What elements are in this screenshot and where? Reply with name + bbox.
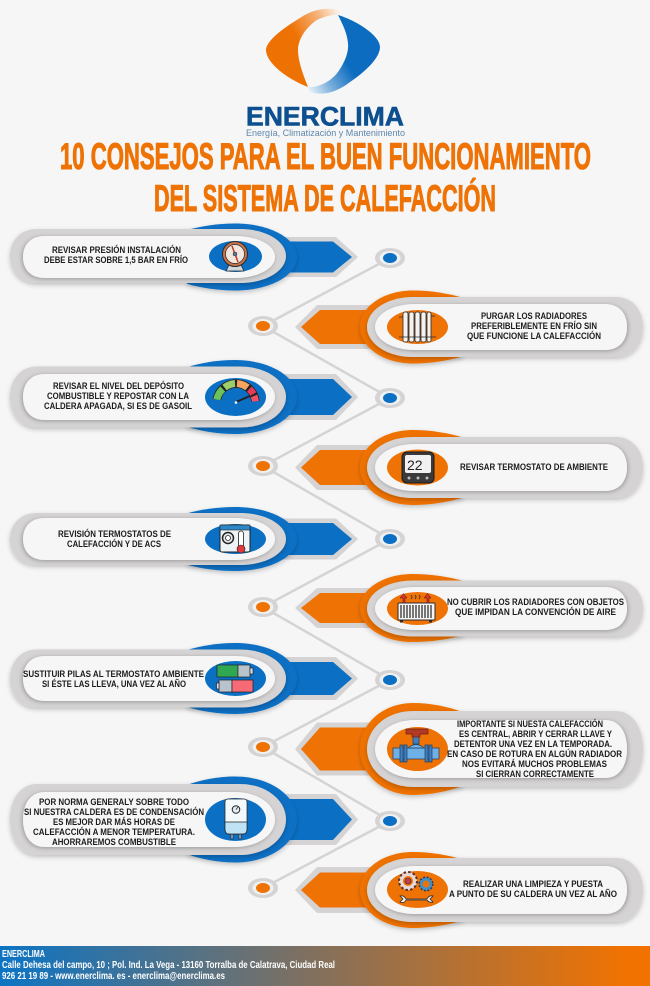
icon: fuel gauge <box>217 384 255 404</box>
tip 9 text: CALEFACCIÓN A MENOR TEMPERATURA. <box>33 826 195 837</box>
tip 8 text: SI CIERRAN CORRECTAMENTE <box>476 769 594 779</box>
connector line <box>263 258 390 888</box>
icon: thermostat and thermometer <box>220 525 250 553</box>
tip 9 card shape <box>10 776 358 862</box>
tip 8 text: ES CENTRAL, ABRIR Y CERRAR LLAVE Y <box>459 729 612 739</box>
tip 5 text: CALEFACCIÓN Y DE ACS <box>67 538 161 549</box>
tip 7 text: SUSTITUIR PILAS AL TERMOSTATO AMBIENTE <box>23 669 204 679</box>
tip 9 text <box>24 797 204 847</box>
icon: boiler <box>225 799 247 839</box>
icon: gears and wrench <box>399 872 433 903</box>
tip 6 text: QUE IMPIDAN LA CONVENCIÓN DE AIRE <box>455 606 616 617</box>
icon: thermostat <box>402 452 434 483</box>
tip 6 text <box>447 597 624 617</box>
tip 6 card shape <box>295 574 643 642</box>
tip 1 card shape <box>10 224 358 290</box>
tip 8 text: IMPORTANTE SI NUESTA CALEFACCIÓN <box>457 718 603 729</box>
panel: tip 2 purgar <box>295 290 643 364</box>
tip 5 text <box>58 528 171 549</box>
tip 8 text <box>447 718 622 779</box>
tip 2 text: PREFERIBLEMENTE EN FRÍO SIN <box>471 321 597 331</box>
tip 9 text: POR NORMA GENERALY SOBRE TODO <box>39 797 189 807</box>
title <box>60 136 591 219</box>
logo swoosh: blue <box>308 15 380 94</box>
icon: batteries <box>216 665 253 692</box>
panel: tip 7 pilas <box>10 643 358 714</box>
icon: valve <box>393 729 439 762</box>
panel: tip 9 norma <box>10 776 358 862</box>
tip 4 text: REVISAR TERMOSTATO DE AMBIENTE <box>460 462 608 472</box>
icon: radiator with heat arrows <box>398 594 435 622</box>
tip 9 text: AHORRAREMOS COMBUSTIBLE <box>52 837 176 847</box>
tip 2 card shape <box>295 290 643 364</box>
tip 7 card shape <box>10 643 358 714</box>
tip 4 card shape <box>295 430 643 505</box>
panel: tip 3 depósito <box>10 360 358 434</box>
panel: tip 1 presión <box>10 224 358 290</box>
tip 8 text: NOS EVITARÁ MUCHOS PROBLEMAS <box>462 759 607 769</box>
tip 1 text <box>44 244 188 265</box>
panel: tip 4 termostato <box>295 430 643 505</box>
tip 5 card shape <box>10 507 358 571</box>
footer contact text: 926 21 19 89 - www.enerclima. es - enerclima@enerclima.es <box>2 970 225 982</box>
footer gradient bar <box>0 946 650 986</box>
tip 3 card shape <box>10 360 358 434</box>
footer <box>0 946 650 986</box>
panel: tip 10 limpieza <box>295 852 643 928</box>
tip 1 text: REVISAR PRESIÓN INSTALACIÓN <box>52 244 181 255</box>
footer contact text <box>2 948 335 982</box>
tip 9 text: ES MEJOR DAR MÁS HORAS DE <box>53 817 175 827</box>
icon: thermostat: 22 <box>407 457 423 473</box>
panel: tip 6 no cubrir <box>295 574 643 642</box>
footer contact text: ENERCLIMA <box>2 948 45 960</box>
tip 10 text: A PUNTO DE SU CALDERA UN VEZ AL AÑO <box>449 889 617 899</box>
tip 10 card shape <box>295 852 643 928</box>
panel: tip 5 revisión <box>10 507 358 571</box>
tip 2 text <box>467 311 601 341</box>
timeline dots <box>248 248 405 898</box>
tip 7 text: SI ÉSTE LAS LLEVA, UNA VEZ AL AÑO <box>42 679 186 689</box>
logo: Enerclima <box>246 9 405 139</box>
panel: tip 8 llave <box>295 703 643 795</box>
tip 2 text: QUE FUNCIONE LA CALEFACCIÓN <box>467 330 601 341</box>
footer contact text: Calle Dehesa del campo, 10 ; Pol. Ind. La Vega - 13160 Torralba de Calatrava, Ciudad Real <box>2 959 335 971</box>
logo tagline: Energía, Climatización y Mantenimiento <box>246 128 405 139</box>
tip 3 text <box>44 380 192 411</box>
logo swoosh: orange <box>266 9 340 87</box>
tip 7 text <box>23 669 204 689</box>
logo wordmark: ENERCLIMA <box>246 102 404 132</box>
tip 6 text: NO CUBRIR LOS RADIADORES CON OBJETOS <box>447 597 624 607</box>
tip 3 text: COMBUSTIBLE Y REPOSTAR CON LA <box>47 391 189 401</box>
tip 2 text: PURGAR LOS RADIADORES <box>481 311 587 321</box>
tip 3 text: REVISAR EL NIVEL DEL DEPÓSITO <box>53 380 184 391</box>
icon: radiator <box>399 312 436 342</box>
tip 8 text: DETENTOR UNA VEZ EN LA TEMPORADA. <box>454 739 612 749</box>
tip 3 text: CALDERA APAGADA, SI ES DE GASOIL <box>44 401 192 411</box>
tip 5 text: REVISIÓN TERMOSTATOS DE <box>58 528 171 539</box>
tip 8 card shape <box>295 703 643 795</box>
tip 1 text: DEBE ESTAR SOBRE 1,5 BAR EN FRÍO <box>44 255 188 265</box>
tip 10 text: REALIZAR UNA LIMPIEZA Y PUESTA <box>463 879 603 889</box>
tip 9 text: SI NUESTRA CALDERA ES DE CONDENSACIÓN <box>24 806 204 817</box>
tip 8 text: EN CASO DE ROTURA EN ALGÚN RADIADOR <box>447 748 622 759</box>
icon: pressure gauge <box>222 242 248 271</box>
tip 10 text <box>449 879 617 899</box>
